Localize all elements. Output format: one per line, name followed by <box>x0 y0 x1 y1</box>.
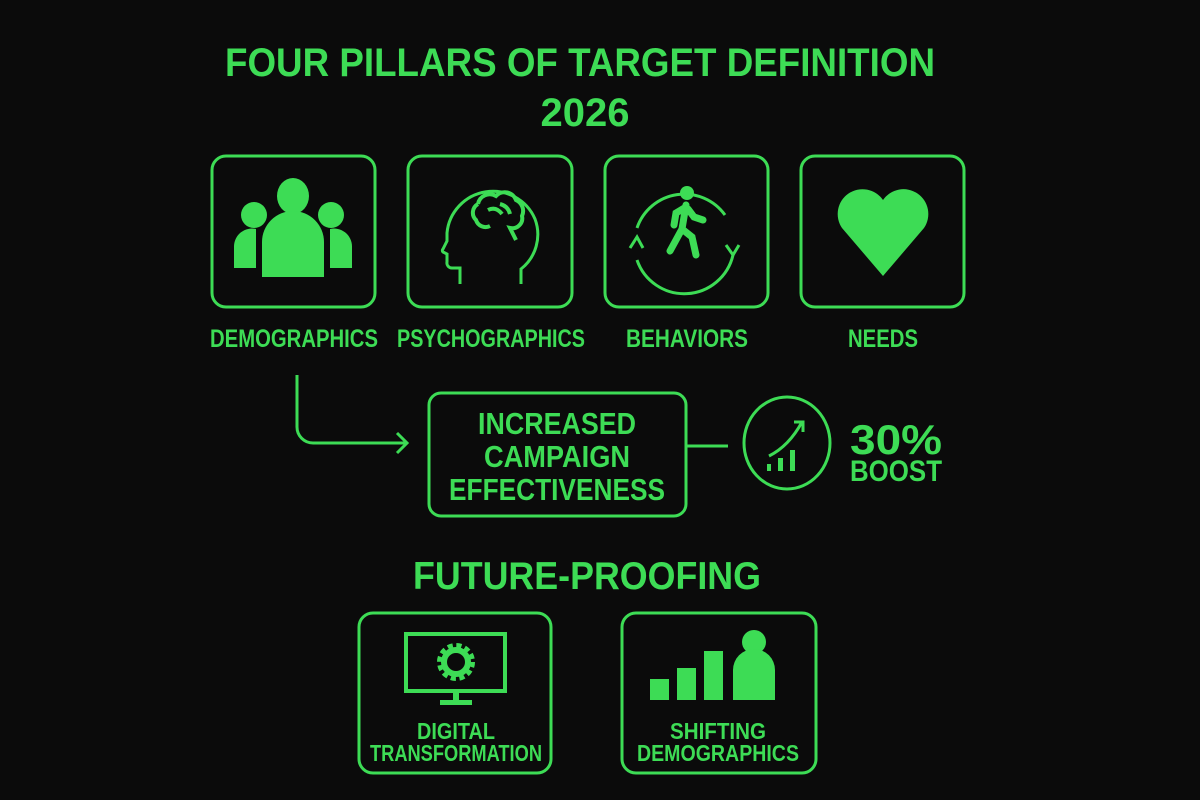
stat: 30% boost: 30% <box>850 416 942 463</box>
title: 2026 <box>541 91 629 135</box>
panel: psychographics <box>397 156 585 353</box>
box: increased campaign effectiveness: CAMPAIGN <box>484 439 630 474</box>
box: increased campaign effectiveness <box>429 393 686 516</box>
panel: shifting demographics <box>622 613 816 773</box>
label: psychographics: PSYCHOGRAPHICS <box>397 325 585 353</box>
icon: monitor with gear <box>406 634 505 705</box>
icon: head with brain <box>442 191 538 284</box>
box: increased campaign effectiveness: EFFECTIVENESS <box>449 472 665 507</box>
panel: digital transformation: TRANSFORMATION <box>370 740 542 766</box>
panel: needs <box>801 156 964 353</box>
icon: heart <box>838 189 928 276</box>
panel: demographics <box>210 156 378 353</box>
connector line <box>686 444 728 448</box>
title: FOUR PILLARS OF TARGET DEFINITION <box>225 41 935 85</box>
icon: walking cycle <box>630 186 739 294</box>
panel: digital transformation <box>359 613 551 773</box>
stat: 30% boost <box>850 416 942 488</box>
panel: behaviors <box>605 156 768 353</box>
panel: digital transformation: DIGITAL <box>417 718 495 744</box>
label: behaviors: BEHAVIORS <box>626 325 748 353</box>
heading: future-proofing: FUTURE-PROOFING <box>413 555 761 598</box>
title <box>225 41 935 135</box>
box: increased campaign effectiveness: INCREASED <box>478 406 636 441</box>
icon: people <box>234 178 352 277</box>
arrow: to effectiveness <box>297 375 407 453</box>
stat: 30% boost: BOOST <box>850 455 942 488</box>
panel: shifting demographics: SHIFTING <box>670 718 766 744</box>
label: demographics: DEMOGRAPHICS <box>210 325 378 353</box>
panel: shifting demographics: DEMOGRAPHICS <box>637 740 799 766</box>
icon: bars with person <box>650 630 775 700</box>
icon: growth circle <box>744 397 830 489</box>
label: needs: NEEDS <box>848 325 918 353</box>
